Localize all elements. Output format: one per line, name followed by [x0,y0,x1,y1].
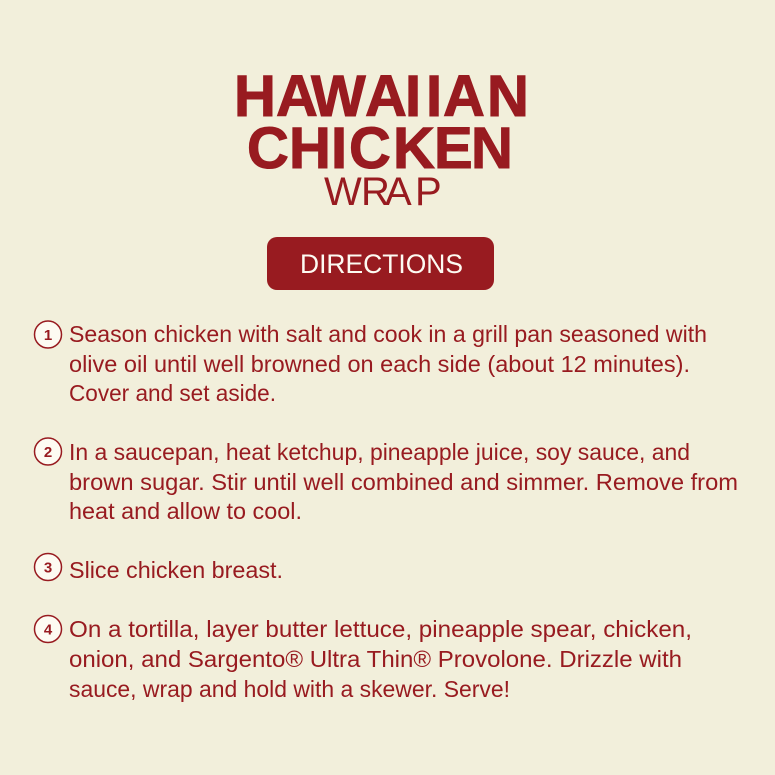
title: WRAP [324,170,442,214]
step 4 text: onion, and Sargento® Ultra Thin® Provolone. Drizzle with [69,646,682,672]
step 4 text: On a tortilla, layer butter lettuce, pineapple spear, chicken, [69,616,692,642]
number badge 1 [34,321,62,348]
number badge 2 [34,438,62,465]
step 4 text: sauce, wrap and hold with a skewer. Serve! [69,676,510,702]
number badge 3: 3 [44,560,52,576]
title: CHICKEN [247,116,513,181]
title [234,64,529,214]
number badge 3 [34,554,62,580]
step 1 text: olive oil until well browned on each side (about 12 minutes). [69,351,690,377]
directions badge: DIRECTIONS [300,249,463,279]
step 1 text: Season chicken with salt and cook in a grill pan seasoned with [69,321,707,347]
step 2 [34,438,738,524]
number badge 4 [34,616,62,642]
title: HAWAIIAN [234,64,529,129]
number badge 2: 2 [44,444,52,461]
step 3 [34,554,283,583]
step 3 text: Slice chicken breast. [69,557,283,583]
number badge 4: 4 [44,622,53,638]
step 4 [34,616,692,702]
step 2 text: In a saucepan, heat ketchup, pineapple juice, soy sauce, and [69,439,690,465]
step 2 text [69,439,738,524]
step 1 text [69,321,707,406]
directions badge [267,237,494,290]
step 4 text [69,616,692,702]
step 2 text: brown sugar. Stir until well combined and simmer. Remove from [69,469,738,495]
step 1 [34,321,707,406]
number badge 1: 1 [44,327,52,344]
step 1 text: Cover and set aside. [69,380,276,406]
step 2 text: heat and allow to cool. [69,498,302,524]
